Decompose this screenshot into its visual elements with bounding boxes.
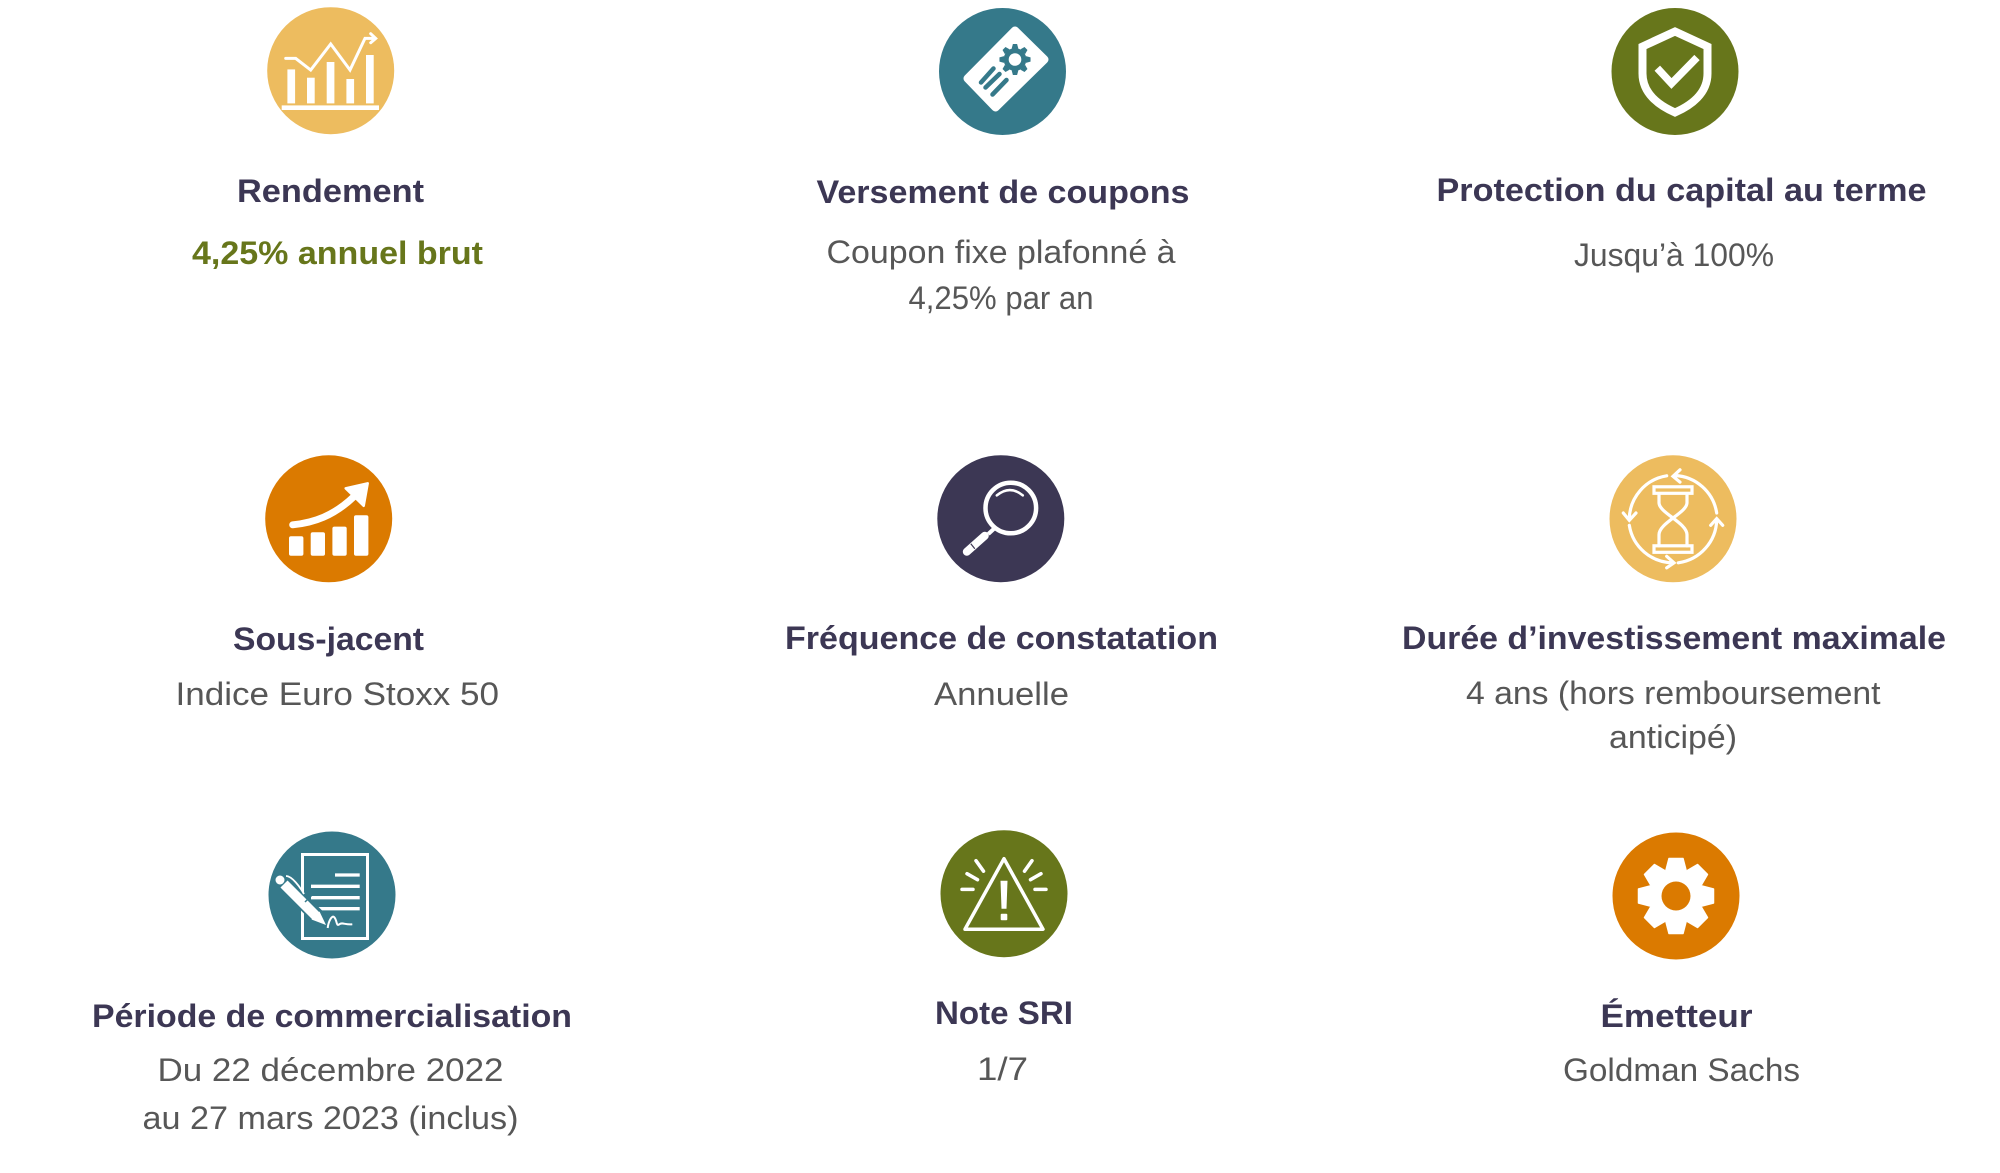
body: période de commercialisation [142, 1052, 518, 1136]
heading: rendement: Rendement [237, 173, 424, 209]
icon: gear [1612, 832, 1740, 960]
panel: protection du capital [1436, 8, 1926, 273]
panel: période de commercialisation [92, 832, 572, 1136]
panel: émetteur [1563, 832, 1800, 1088]
heading: sous-jacent: Sous-jacent [233, 621, 424, 657]
body: fréquence de constatation: Annuelle [934, 676, 1069, 712]
body: période de commercialisation: Du 22 décembre 2022 [158, 1052, 504, 1088]
body: durée d'investissement [1466, 675, 1881, 755]
value: rendement: 4,25% annuel brut [192, 235, 483, 271]
panel: fréquence de constatation [785, 455, 1218, 712]
body: émetteur: Goldman Sachs [1563, 1052, 1800, 1088]
body: versement de coupons [826, 234, 1176, 316]
body: durée d'investissement: anticipé) [1609, 719, 1737, 755]
body: période de commercialisation: au 27 mars 2023 (inclus) [142, 1100, 518, 1136]
heading: émetteur: Émetteur [1600, 998, 1752, 1034]
heading: note SRI: Note SRI [935, 995, 1073, 1031]
icon: magnifying glass [937, 455, 1064, 582]
icon: warning triangle [940, 830, 1068, 957]
panel: versement de coupons [816, 8, 1190, 316]
icon: rising arrow over bars [265, 455, 392, 582]
panel: sous-jacent [176, 455, 499, 712]
icon: bar chart with rising line [267, 7, 394, 134]
icon: coupon card with gear [939, 8, 1066, 135]
body: durée d'investissement: 4 ans (hors remboursement [1466, 675, 1881, 711]
body: sous-jacent: Indice Euro Stoxx 50 [176, 676, 499, 712]
icon: document with pen and signature [268, 832, 396, 958]
body: versement de coupons: Coupon fixe plafonné à [826, 234, 1176, 270]
body: note SRI: 1/7 [977, 1051, 1028, 1087]
heading: protection du capital: Protection du capital au terme [1436, 172, 1926, 208]
body: protection du capital: Jusqu’à 100% [1574, 237, 1774, 273]
body: versement de coupons: 4,25% par an [908, 280, 1094, 316]
icon: hourglass with circular arrows [1610, 455, 1736, 582]
heading: durée d'investissement: Durée d’investissement maximale [1402, 620, 1946, 656]
panel: note SRI [935, 830, 1073, 1087]
heading: versement de coupons: Versement de coupons [816, 174, 1190, 210]
panel: durée d'investissement [1402, 455, 1946, 755]
heading: fréquence de constatation: Fréquence de constatation [785, 620, 1218, 656]
icon: shield with check mark [1612, 8, 1738, 135]
panel: rendement [192, 7, 483, 271]
heading: période de commercialisation: Période de commercialisation [92, 998, 572, 1034]
